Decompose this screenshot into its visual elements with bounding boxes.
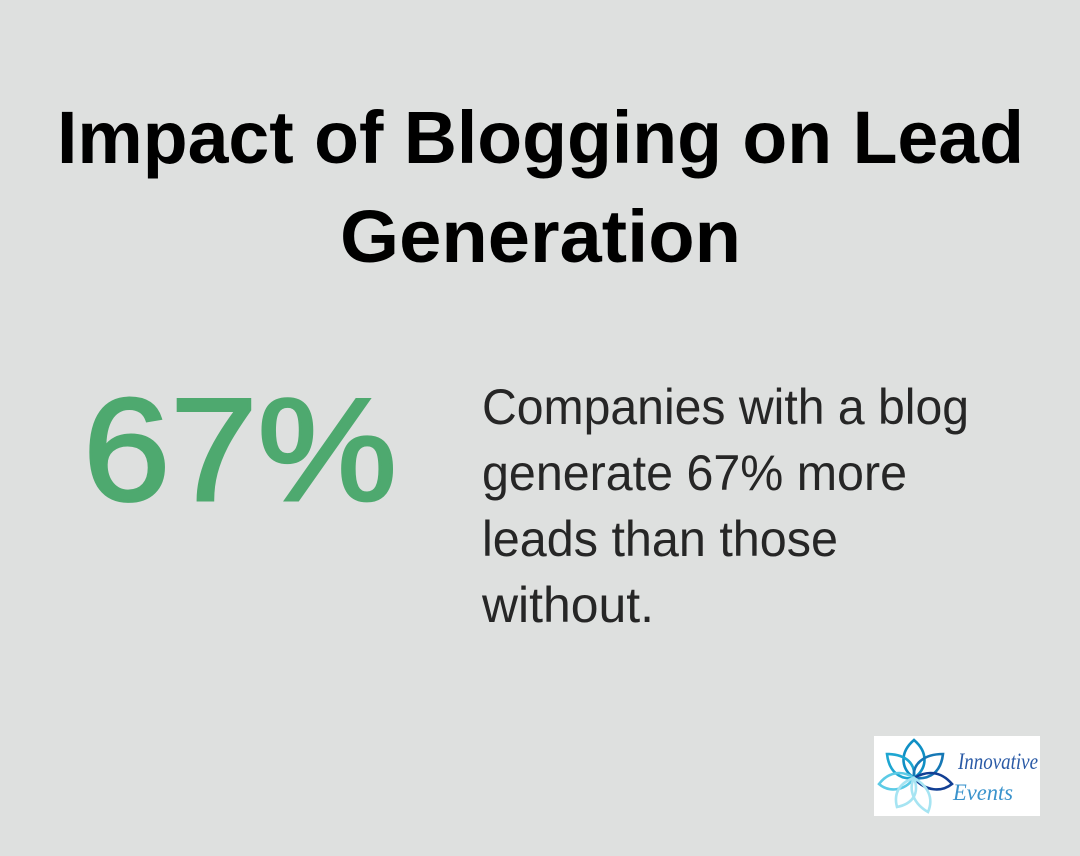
logo wordmark: Events xyxy=(952,780,1013,805)
description text: generate 67% more xyxy=(482,445,907,501)
description text: without. xyxy=(481,577,654,633)
logo wordmark xyxy=(952,749,1038,805)
title xyxy=(57,96,1024,278)
logo wordmark: Innovative xyxy=(957,749,1038,774)
title: Impact of Blogging on Lead xyxy=(57,96,1024,179)
icon: lotus flower xyxy=(879,740,952,812)
title: Generation xyxy=(340,195,741,278)
description text: leads than those xyxy=(482,511,838,567)
description text xyxy=(481,379,969,633)
logo: Innovative Events xyxy=(874,736,1040,816)
description text: Companies with a blog xyxy=(482,379,969,435)
statistic: 67%: 67% xyxy=(83,368,397,531)
